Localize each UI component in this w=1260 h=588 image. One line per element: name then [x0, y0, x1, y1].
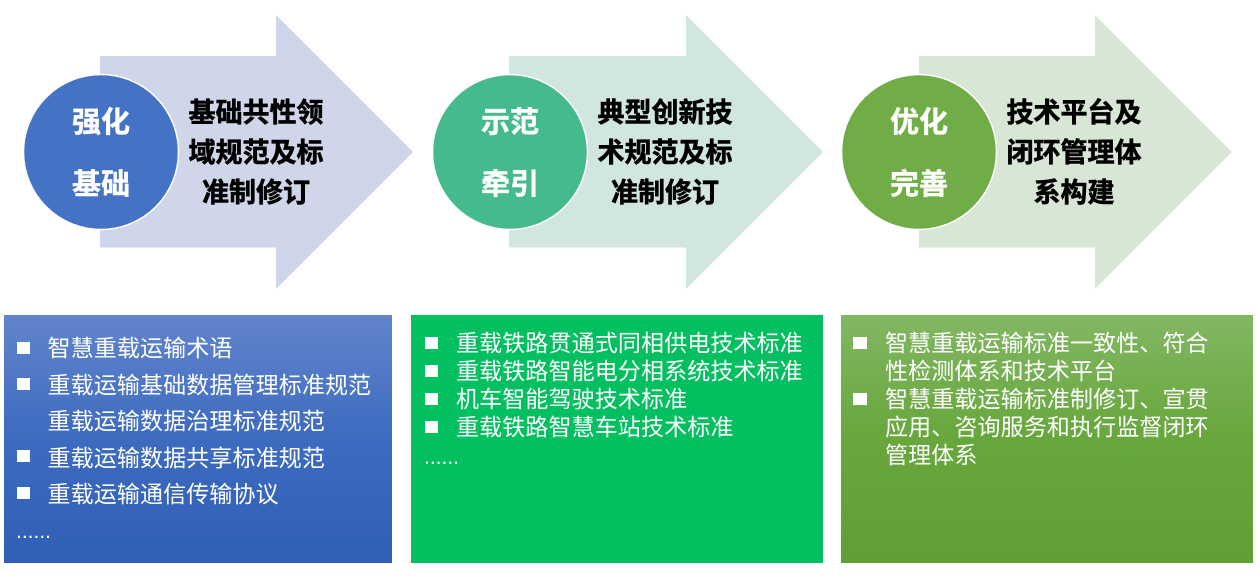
panel: green list: [411, 315, 823, 563]
column 1 header: 强化基础: [24, 15, 413, 289]
list text: blue list: [16, 335, 371, 543]
bullets: blue list: [17, 342, 30, 499]
arrow text 3: [1006, 97, 1142, 208]
panel: blue list: [4, 315, 392, 563]
list text: green list: 重载铁路智慧车站技术标准: [456, 414, 733, 440]
circle: 优化完善: 完善: [890, 168, 948, 201]
arrow text 1: 域规范及标: [188, 138, 324, 168]
list text: olive green list: 管理体系: [885, 442, 977, 468]
list text: green list: 重载铁路贯通式同相供电技术标准: [456, 330, 803, 356]
arrow text 3: 系构建: [1034, 178, 1114, 208]
list text: olive green list: 智慧重载运输标准一致性、符合: [885, 330, 1209, 356]
list text: olive green list: [885, 330, 1209, 468]
arrow text 2: 术规范及标: [598, 138, 732, 168]
circle: 优化完善: 优化: [890, 106, 948, 139]
list text: blue list: ......: [16, 520, 51, 543]
circle: 强化基础: [24, 74, 178, 230]
list text: olive green list: 应用、咨询服务和执行监督闭环: [885, 414, 1209, 440]
bullets: olive green list: [853, 337, 867, 405]
bullets: green list: [425, 337, 438, 433]
circle: 示范牵引: [432, 74, 588, 230]
list text: green list: 机车智能驾驶技术标准: [456, 386, 687, 412]
list text: green list: ......: [424, 446, 459, 469]
arrow text 3: 技术平台及: [1006, 97, 1142, 128]
circle: 强化基础: 强化: [72, 106, 130, 139]
arrow text 2: 准制修订: [611, 178, 719, 208]
list text: blue list: 重载运输通信传输协议: [48, 481, 279, 507]
list text: blue list: 重载运输数据共享标准规范: [48, 445, 325, 471]
arrow text 1: 基础共性领: [188, 98, 324, 128]
circle: 示范牵引: 示范: [481, 106, 539, 139]
circle: 示范牵引: 牵引: [481, 168, 539, 201]
arrow 3: [919, 15, 1232, 289]
list text: green list: [424, 330, 803, 469]
arrow text 1: 准制修订: [202, 178, 310, 208]
column 2 header: 示范牵引: [432, 15, 823, 289]
circle: 强化基础: 基础: [72, 168, 130, 201]
list text: green list: 重载铁路智能电分相系统技术标准: [456, 358, 803, 384]
panel: olive green list: [841, 315, 1253, 563]
list text: blue list: 重载运输基础数据管理标准规范: [48, 372, 371, 398]
arrow text 2: [598, 98, 732, 208]
arrow text 2: 典型创新技: [598, 98, 732, 128]
arrow 2: [509, 15, 823, 289]
arrow 1: [100, 15, 413, 289]
list text: olive green list: 性检测体系和技术平台: [885, 358, 1116, 384]
arrow text 3: 闭环管理体: [1006, 138, 1142, 168]
list text: blue list: 重载运输数据治理标准规范: [48, 408, 325, 434]
arrow text 1: [188, 98, 324, 208]
circle: 优化完善: [842, 74, 996, 230]
list text: olive green list: 智慧重载运输标准制修订、宣贯: [885, 386, 1209, 412]
column 3 header: 优化完善: [842, 15, 1232, 289]
list text: blue list: 智慧重载运输术语: [48, 335, 232, 361]
